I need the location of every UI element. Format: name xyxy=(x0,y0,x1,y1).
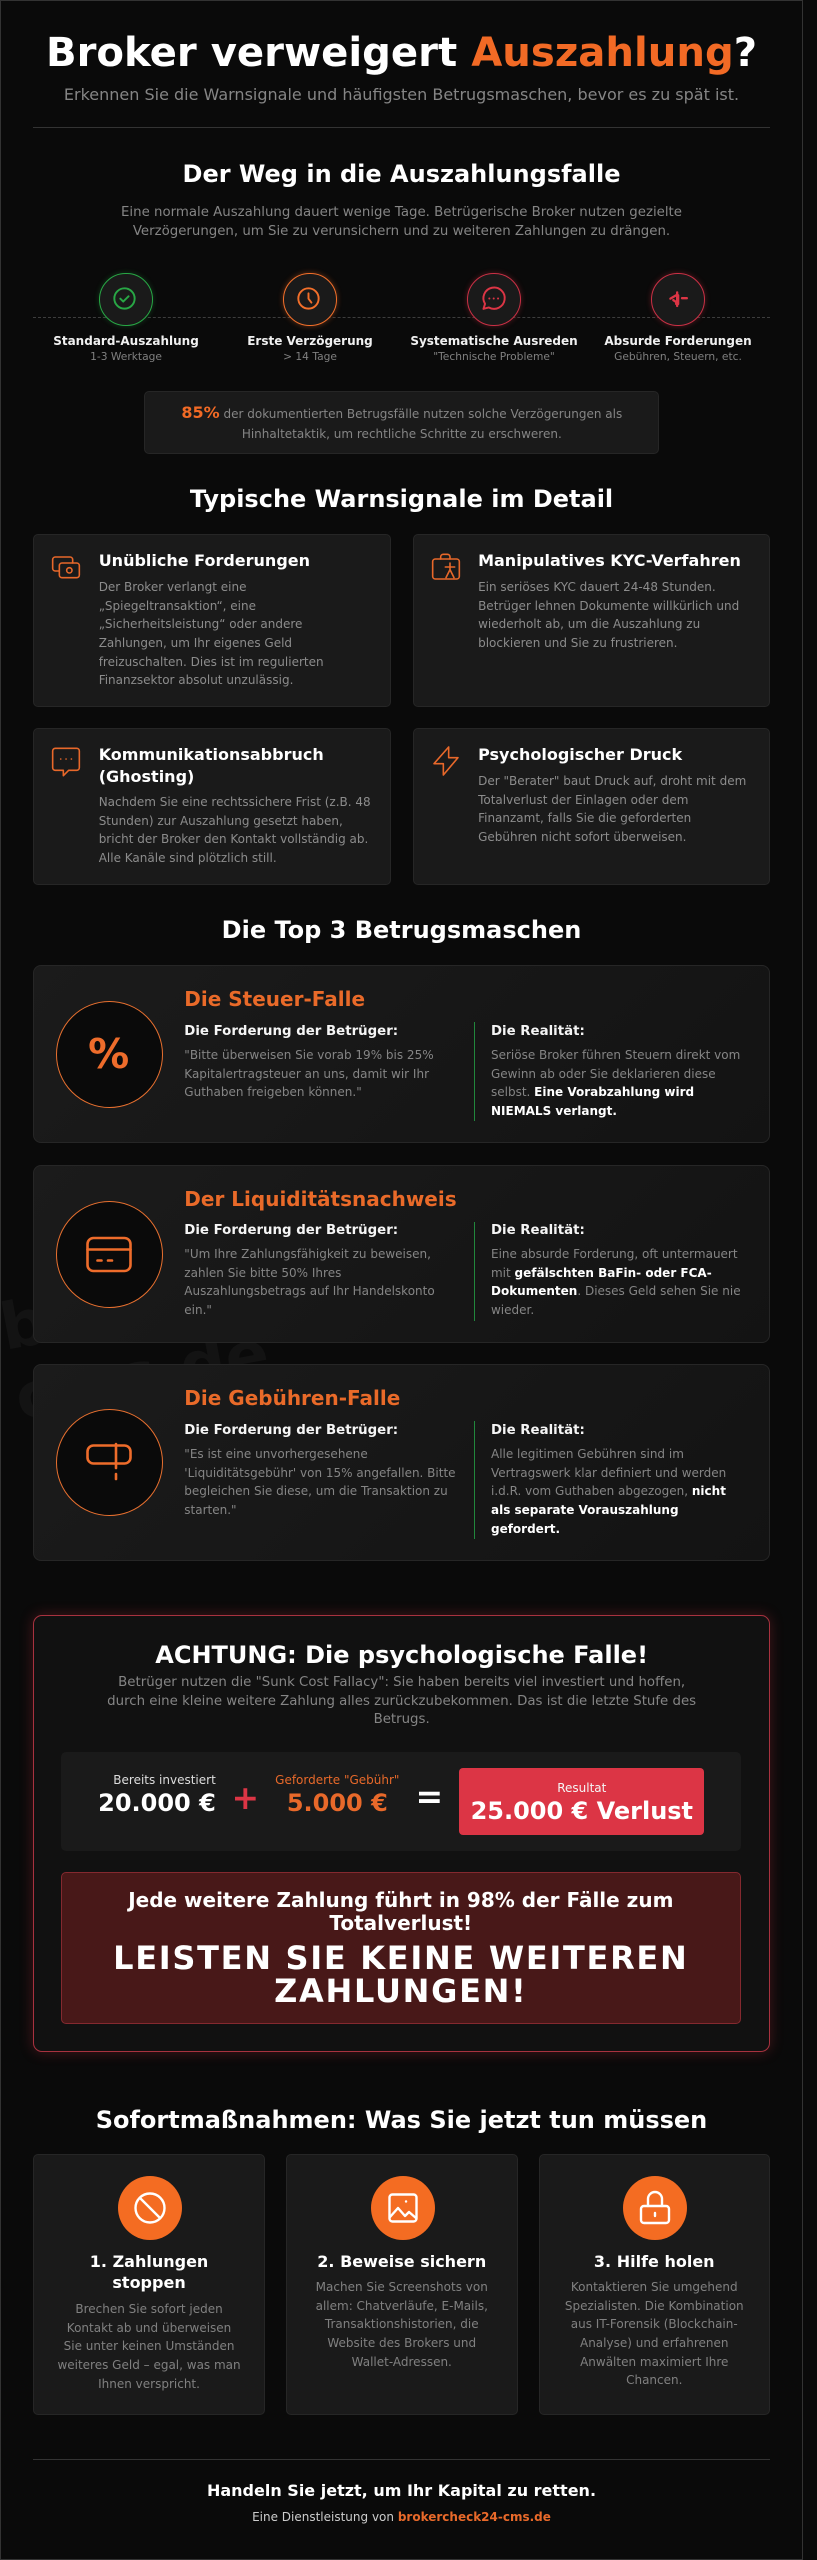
warning text xyxy=(107,1675,696,1727)
card title: Psychologischer Druck xyxy=(478,745,682,764)
statistic text xyxy=(127,1888,673,1935)
action text xyxy=(57,2302,241,2391)
label: Systematische Ausreden xyxy=(410,334,578,348)
card title: Manipulatives KYC-Verfahren xyxy=(478,551,741,570)
panel: Kommunikationsabbruch xyxy=(33,728,391,885)
demand text xyxy=(184,1247,435,1317)
icon: fee slip xyxy=(56,1409,163,1516)
term: fee: 5.000 € xyxy=(287,1789,388,1817)
sublabel: "Technische Probleme" xyxy=(433,350,555,363)
demand text: ein." xyxy=(184,1303,212,1317)
icon: speech bubble xyxy=(52,748,80,776)
label: Standard-Auszahlung xyxy=(53,334,199,348)
demand text: Guthaben freigeben können." xyxy=(184,1085,362,1099)
panel: Psychologischer Druck xyxy=(413,728,770,885)
step: Systematische Ausreden xyxy=(410,270,578,363)
icon: broken fee glyph xyxy=(651,273,705,326)
action text: aus IT-Forensik (Blockchain- xyxy=(571,2317,738,2331)
card text: Finanzsektor absolut unzulässig. xyxy=(99,673,293,687)
icon: chat bubble xyxy=(467,273,521,326)
card text: Alle Kanäle sind plötzlich still. xyxy=(99,851,277,865)
panel: Die Steuer-Falle xyxy=(33,965,770,1143)
card text: Totalverlust der Einlagen oder dem xyxy=(478,793,688,807)
icon: image xyxy=(371,2176,435,2240)
reality text xyxy=(491,1048,740,1118)
term: invested: Bereits investiert xyxy=(113,1773,216,1787)
demand text: "Bitte überweisen Sie vorab 19% bis 25% xyxy=(184,1048,434,1062)
panel: step 2 secure evidence xyxy=(286,2154,518,2415)
card text: bricht der Broker den Kontakt vollständig ab. xyxy=(99,832,368,846)
intro text: Eine normale Auszahlung dauert wenige Tage. Betrügerische Broker nutzen gezielte xyxy=(121,205,682,220)
demand text: "Es ist eine unvorhergesehene xyxy=(184,1447,368,1461)
warning text: Betrugs. xyxy=(374,1712,430,1727)
panel: step 1 stop payments xyxy=(33,2154,265,2415)
panel: Unübliche Forderungen xyxy=(33,534,391,707)
card title: Unübliche Forderungen xyxy=(99,551,310,570)
action text: Wallet-Adressen. xyxy=(352,2355,452,2369)
action text xyxy=(316,2280,488,2369)
card text: Finanzamt, falls Sie die geforderten xyxy=(478,811,691,825)
watermark: cms.de xyxy=(9,1316,275,1436)
card text xyxy=(478,774,746,844)
card text: Gebühren nicht sofort überweisen. xyxy=(478,830,686,844)
scheme title: Der Liquiditätsnachweis xyxy=(184,1187,457,1211)
demand text: Auszahlungsbetrags auf Ihr Handelskonto xyxy=(184,1284,435,1298)
heading: Der Weg in die Auszahlungsfalle: Der Weg in die Auszahlungsfalle xyxy=(183,160,620,188)
result box xyxy=(459,1768,704,1835)
callout: 85%: Hinhaltetaktik, um rechtliche Schritte zu erschweren. xyxy=(242,427,562,441)
demand text xyxy=(184,1048,434,1099)
demand text xyxy=(184,1447,456,1517)
demand label: Die Forderung der Betrüger: xyxy=(184,1024,398,1039)
title: Broker verweigert Auszahlung? xyxy=(46,30,757,76)
step: Standard-Auszahlung xyxy=(53,270,199,363)
demand label: Die Forderung der Betrüger: xyxy=(184,1223,398,1238)
card text: Der "Berater" baut Druck auf, droht mit dem xyxy=(478,774,746,788)
callout: 85% xyxy=(144,391,659,454)
icon: lock xyxy=(623,2176,687,2240)
reality text: NIEMALS verlangt. xyxy=(491,1104,617,1118)
action text: Spezialisten. Die Kombination xyxy=(565,2299,744,2313)
stop panel xyxy=(61,1872,741,2024)
panel: Der Liquiditätsnachweis xyxy=(33,1165,770,1343)
result box: 25.000 € Verlust xyxy=(471,1797,693,1825)
action title: 2. Beweise sichern xyxy=(317,2252,486,2271)
footer call to action: Handeln Sie jetzt, um Ihr Kapital zu retten. xyxy=(207,2481,596,2500)
action text: Brechen Sie sofort jeden xyxy=(75,2302,223,2316)
demand text: zahlen Sie bitte 50% Ihres xyxy=(184,1266,341,1280)
action title: stoppen xyxy=(112,2273,186,2292)
card text: Betrüger lehnen Dokumente willkürlich und xyxy=(478,599,739,613)
scheme title: Die Gebühren-Falle xyxy=(184,1386,400,1410)
statistic text: Jede weitere Zahlung führt in 98% der Fälle zum xyxy=(128,1888,673,1912)
term: invested: 20.000 € xyxy=(98,1789,216,1817)
action title: 1. Zahlungen xyxy=(90,2252,208,2271)
label: Erste Verzögerung xyxy=(247,334,373,348)
demand text: Kapitalertragsteuer an uns, damit wir Ihr xyxy=(184,1067,429,1081)
icon: cash stack xyxy=(52,556,80,578)
reality text: gefordert. xyxy=(491,1522,560,1536)
heading: Sofortmaßnahmen: Sofortmaßnahmen: Was Sie jetzt tun müssen xyxy=(96,2106,707,2134)
demand text: 'Liquiditätsgebühr' von 15% angefallen. Bitte xyxy=(184,1466,456,1480)
action text: Anwälten maximiert Ihre xyxy=(580,2355,728,2369)
watermark: brokercheck24- xyxy=(0,1191,559,1366)
reality text: Gewinn ab oder Sie deklarieren diese xyxy=(491,1067,716,1081)
reality text xyxy=(491,1447,726,1536)
reality text: Seriöse Broker führen Steuern direkt vom xyxy=(491,1048,740,1062)
icon: lightning bolt xyxy=(433,746,459,776)
reality text: Dokumenten. Dieses Geld sehen Sie nie xyxy=(491,1284,741,1298)
panel: Manipulatives KYC-Verfahren xyxy=(413,534,770,707)
icon: credit card xyxy=(56,1201,163,1308)
reality text: Alle legitimen Gebühren sind im xyxy=(491,1447,684,1461)
footer credit: Eine Dienstleistung von brokercheck24-cms.de xyxy=(252,2510,551,2524)
intro text: Verzögerungen, um Sie zu verunsichern und zu weiteren Zahlungen zu drängen. xyxy=(133,224,670,239)
warning heading: ACHTUNG: Die psychologische Falle! xyxy=(155,1641,648,1669)
action text xyxy=(565,2280,744,2387)
stop message: LEISTEN SIE KEINE WEITEREN xyxy=(113,1939,688,1977)
heading: Die Top 3 Betrugsmaschen: Die Top 3 Betrugsmaschen xyxy=(222,916,581,944)
statistic text: Totalverlust! xyxy=(329,1911,472,1935)
action text: Ihnen verspricht. xyxy=(98,2377,200,2391)
card text: Zahlungen, um Ihr eigenes Geld xyxy=(99,636,292,650)
equals sign: = xyxy=(415,1777,443,1816)
sublabel: > 14 Tage xyxy=(283,350,337,363)
heading: Typische Warnsignale im Detail: Typische Warnsignale im Detail xyxy=(190,485,613,513)
action text: Kontakt ab und überweisen xyxy=(67,2321,231,2335)
card title: Kommunikationsabbruch xyxy=(99,745,324,764)
reality label: Die Realität: xyxy=(491,1223,585,1238)
card text: „Spiegeltransaktion“, eine xyxy=(99,599,256,613)
card text xyxy=(98,795,371,865)
card title xyxy=(99,745,324,786)
card title: (Ghosting) xyxy=(99,767,194,786)
reality text: als separate Vorauszahlung xyxy=(491,1503,679,1517)
action text: Chancen. xyxy=(626,2373,682,2387)
action text: weiteres Geld – egal, was man xyxy=(57,2358,241,2372)
card text: freizuschalten. Dies ist im regulierten xyxy=(99,655,324,669)
action text: Sie unter keinen Umständen xyxy=(64,2339,234,2353)
action text: Website des Brokers und xyxy=(327,2336,476,2350)
step: Erste Verzögerung xyxy=(247,270,373,363)
reality text: Eine absurde Forderung, oft untermauert xyxy=(491,1247,738,1261)
reality label: Die Realität: xyxy=(491,1024,585,1039)
reality text xyxy=(491,1247,741,1317)
term: fee: Geforderte "Gebühr" xyxy=(275,1773,399,1787)
icon: percent: % xyxy=(88,1030,129,1078)
intro text xyxy=(121,205,682,239)
demand text: starten." xyxy=(184,1503,237,1517)
step: Absurde Forderungen xyxy=(604,270,752,363)
reality text: wieder. xyxy=(491,1303,534,1317)
card text xyxy=(478,580,739,650)
card text: Nachdem Sie eine rechtssichere Frist (z.B. 48 xyxy=(99,795,371,809)
reality text: selbst. Eine Vorabzahlung wird xyxy=(491,1085,694,1099)
card text: wiederholt ab, um die Auszahlung zu xyxy=(478,617,700,631)
icon: check circle xyxy=(99,273,153,326)
subtitle: Erkennen Sie die Warnsignale und häufigsten Betrugsmaschen, bevor es zu spät ist. xyxy=(64,85,739,104)
icon: ban xyxy=(118,2176,182,2240)
card text: „Sicherheitsleistung“ oder andere xyxy=(99,617,302,631)
card text: Ein seriöses KYC dauert 24-48 Stunden. xyxy=(478,580,716,594)
equation panel xyxy=(61,1752,741,1851)
reality text: mit gefälschten BaFin- oder FCA- xyxy=(491,1266,712,1280)
card text: Der Broker verlangt eine xyxy=(99,580,247,594)
icon: briefcase with figure xyxy=(432,554,460,580)
callout: 85%: 85% der dokumentierten Betrugsfälle nutzen solche Verzögerungen als xyxy=(181,403,622,422)
panel: step 3 get help xyxy=(538,2154,770,2415)
action text: allem: Chatverläufe, E-Mails, xyxy=(316,2299,488,2313)
scheme title: Die Steuer-Falle xyxy=(184,987,365,1011)
action text: Transaktionshistorien, die xyxy=(325,2317,479,2331)
reality label: Die Realität: xyxy=(491,1423,585,1438)
plus sign: + xyxy=(231,1778,259,1817)
sublabel: 1-3 Werktage xyxy=(90,350,162,363)
reality text: Vertragswerk klar definiert und werden xyxy=(491,1466,726,1480)
sublabel: Gebühren, Steuern, etc. xyxy=(614,350,742,363)
action text: Analyse) und erfahrenen xyxy=(580,2336,729,2350)
card text: blockieren und Sie zu frustrieren. xyxy=(478,636,677,650)
icon: clock xyxy=(283,273,337,326)
label: Absurde Forderungen xyxy=(604,334,752,348)
stop message: ZAHLUNGEN! xyxy=(274,1972,527,2010)
stop message xyxy=(113,1939,688,2010)
card text: Stunden) zur Auszahlung gesetzt haben, xyxy=(99,814,343,828)
reality text: i.d.R. vom Guthaben abgezogen, nicht xyxy=(491,1484,726,1498)
card text xyxy=(99,580,324,687)
panel: psychological trap warning xyxy=(33,1615,770,2052)
action title: 3. Hilfe holen xyxy=(594,2252,715,2271)
warning text: durch eine kleine weitere Zahlung alles zurückzubekommen. Das ist die letzte Stufe des xyxy=(107,1694,696,1709)
panel: Die Gebühren-Falle xyxy=(33,1364,770,1561)
icon: percent xyxy=(56,1001,163,1108)
demand text: begleichen Sie diese, um die Transaktion zu xyxy=(184,1484,448,1498)
result box: Resultat xyxy=(557,1781,606,1795)
demand label: Die Forderung der Betrüger: xyxy=(184,1423,398,1438)
warning text: Betrüger nutzen die "Sunk Cost Fallacy": Sie haben bereits viel investiert und hoffen, xyxy=(118,1675,685,1690)
action title xyxy=(90,2252,208,2292)
term: invested xyxy=(98,1773,216,1817)
demand text: "Um Ihre Zahlungsfähigkeit zu beweisen, xyxy=(184,1247,431,1261)
term: fee xyxy=(275,1773,399,1817)
action text: Machen Sie Screenshots von xyxy=(316,2280,488,2294)
action text: Kontaktieren Sie umgehend xyxy=(571,2280,738,2294)
